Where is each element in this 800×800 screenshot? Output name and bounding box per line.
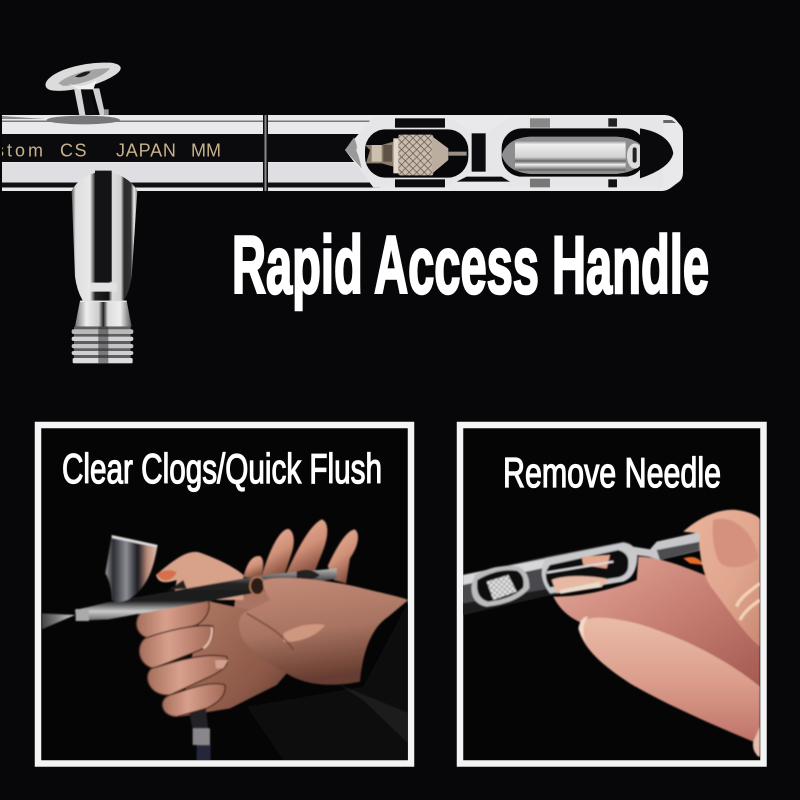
needle chuck (633, 532, 702, 560)
panel photo: hands holding airbrush (42, 519, 408, 762)
knob window (365, 129, 468, 178)
sleeve (247, 602, 408, 760)
trigger seat (47, 116, 120, 124)
thread (72, 327, 133, 363)
engraved text (2, 144, 220, 156)
airbrush close-up (0, 63, 683, 363)
thumb (683, 510, 760, 647)
panel heading: Remove Needle (503, 449, 721, 496)
hand edge (753, 727, 760, 757)
cylinder window (502, 128, 645, 177)
hose (189, 708, 208, 732)
first window (472, 566, 529, 607)
middle finger (578, 618, 760, 743)
airbrush handle (463, 542, 637, 615)
air valve body (47, 116, 137, 363)
thumb hand (239, 578, 408, 685)
panel: clear clogs / quick flush (38, 425, 411, 764)
fist palm (180, 600, 287, 717)
panel photo: fingers pulling needle (463, 510, 760, 757)
back palm (233, 590, 270, 611)
raised fingers (243, 519, 358, 583)
fist fingers (136, 597, 227, 717)
index finger (553, 557, 760, 687)
engraved text: JAPAN (116, 140, 177, 160)
trigger finger (156, 552, 243, 600)
panel heading: Clear Clogs/Quick Flush (62, 445, 382, 492)
panel: remove needle (460, 425, 764, 764)
barrel (2, 115, 683, 191)
second window (542, 543, 637, 593)
paint cup (105, 535, 158, 603)
engraved text: MM (191, 140, 221, 160)
spray (42, 613, 75, 629)
airbrush in hands (75, 535, 337, 621)
rapid access handle windows (345, 117, 673, 187)
trigger lever (46, 63, 121, 118)
engraved text: CS (60, 140, 88, 160)
panel frame (460, 425, 764, 764)
panel frame (38, 425, 411, 764)
far end top bevel (625, 120, 676, 123)
